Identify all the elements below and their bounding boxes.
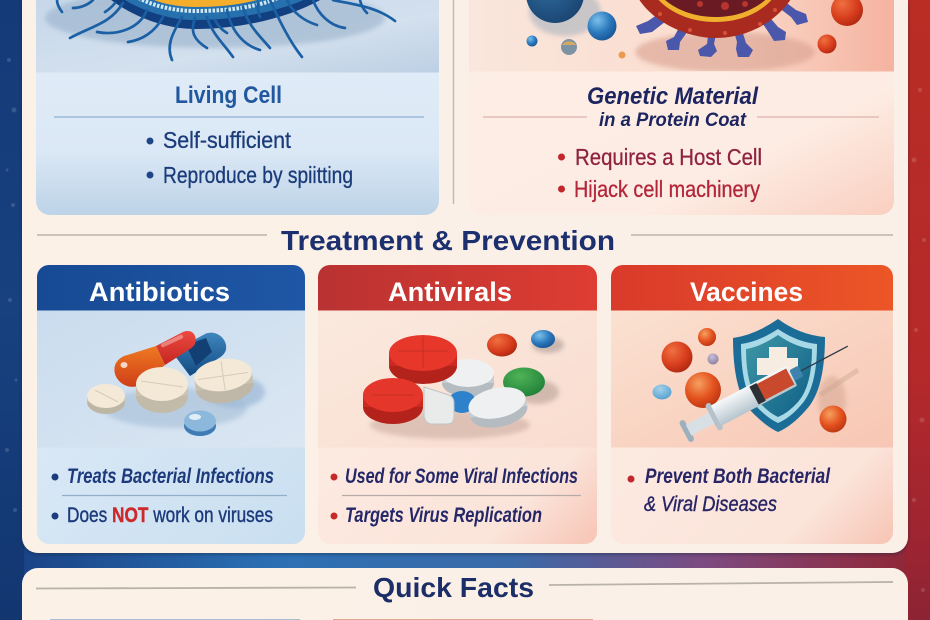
antibiotics title: Antibiotics bbox=[89, 277, 230, 307]
icon: pills and capsules bbox=[87, 331, 265, 436]
blue and red spheres bbox=[526, 0, 863, 58]
heading side rules bbox=[483, 116, 879, 118]
left navy edge bbox=[0, 0, 24, 620]
panel: antivirals bbox=[318, 265, 597, 544]
icon: red, white and green pills bbox=[363, 330, 564, 439]
antivirals title: Antivirals bbox=[388, 277, 512, 307]
antibiotics image area bbox=[37, 300, 305, 448]
quick facts heading bbox=[36, 572, 893, 603]
quick facts card tops bbox=[50, 619, 593, 620]
vaccines text area bbox=[611, 265, 893, 544]
icon: shield, syringe and microbes bbox=[652, 319, 858, 446]
antibiotics text area bbox=[37, 265, 305, 544]
vaccines header bbox=[611, 265, 893, 310]
quick facts heading: Quick Facts bbox=[373, 572, 534, 603]
virus body bbox=[636, 0, 808, 57]
bullet: prevent both bacterial and viral diseases: & Viral Diseases bbox=[644, 493, 777, 516]
bullet: hijack cell machinery: Hijack cell machinery bbox=[574, 176, 760, 202]
syringe bbox=[677, 333, 855, 446]
bullet: does not work on viruses: Does NOT work on viruses bbox=[67, 504, 273, 527]
bullet: self-sufficient: Self-sufficient bbox=[163, 127, 292, 153]
bullet: targets virus replication: Targets Virus Replication bbox=[345, 504, 542, 527]
bullet: treats bacterial infections: Treats Bacterial Infections bbox=[67, 465, 274, 488]
bullet: prevent both bacterial and viral diseases bbox=[628, 465, 831, 516]
heading: treatment and prevention: Treatment & Prevention bbox=[281, 225, 615, 256]
virus image band bbox=[469, 0, 894, 72]
panel: living cell (bacteria) bbox=[36, 0, 439, 215]
bullet: used for some viral infections: Used for Some Viral Infections bbox=[345, 465, 578, 488]
panel: vaccines bbox=[611, 265, 893, 544]
icon: virus and spheres bbox=[526, 0, 863, 72]
antibiotics header bbox=[37, 265, 305, 310]
heading: genetic material in a protein coat: Genetic Material bbox=[587, 83, 759, 110]
divider bbox=[54, 116, 424, 118]
bacteria image band bbox=[36, 0, 439, 72]
bullet: prevent both bacterial and viral diseases: Prevent Both Bacterial bbox=[645, 465, 831, 488]
panel: quick facts bbox=[22, 568, 908, 620]
vaccines image area bbox=[611, 300, 893, 448]
heading: genetic material in a protein coat: in a Protein Coat bbox=[599, 110, 747, 131]
virus card background bbox=[469, 0, 894, 215]
antivirals text area bbox=[318, 265, 597, 544]
heading: genetic material in a protein coat bbox=[587, 83, 759, 131]
centre vertical divider bbox=[452, 0, 454, 204]
antivirals image area bbox=[318, 300, 597, 448]
panel: antibiotics bbox=[37, 265, 305, 544]
antivirals header bbox=[318, 265, 597, 310]
quick facts background bbox=[22, 568, 908, 620]
heading: living cell: Living Cell bbox=[175, 82, 282, 109]
icon: bacterium bbox=[45, 0, 395, 60]
bullet: requires a host cell: Requires a Host Cell bbox=[575, 144, 762, 170]
vaccines title: Vaccines bbox=[690, 277, 803, 307]
bacteria card background bbox=[36, 0, 439, 215]
panel: genetic material (virus) bbox=[469, 0, 894, 215]
bullet: reproduce by splitting: Reproduce by spiitting bbox=[163, 162, 353, 188]
right red edge bbox=[906, 0, 930, 620]
